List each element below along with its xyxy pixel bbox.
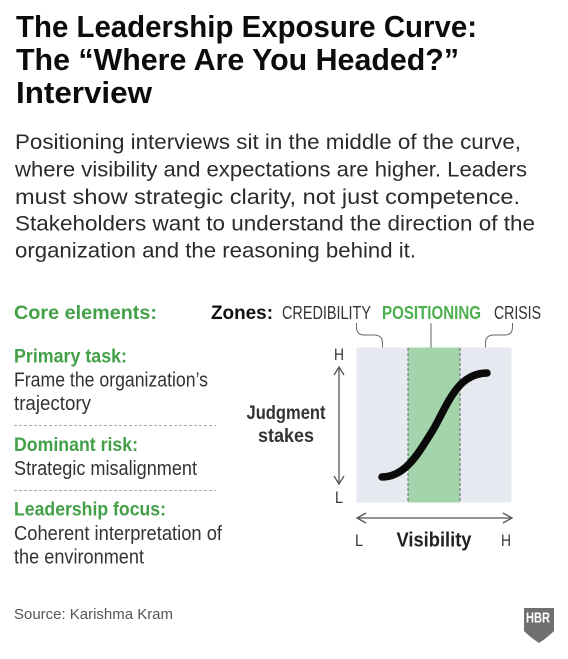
title: Interview [16,76,152,110]
intro text block: where visibility and expectations are higher. Leaders [14,158,527,182]
source: Source: Karishma Kram [14,607,173,623]
core element: leadership focus: Leadership focus: [14,498,166,520]
core element: leadership focus: the environment [14,546,144,568]
y axis labels: stakes [258,426,314,447]
y axis arrow [334,367,344,484]
core element: primary task: trajectory [14,393,91,415]
chart background [356,348,512,502]
x axis labels: H [501,531,511,550]
x axis labels: Visibility [396,528,472,552]
core element: dominant risk [14,434,197,480]
core element: leadership focus: Coherent interpretation of [14,523,222,545]
title [16,10,477,110]
intro text block: Stakeholders want to understand the direction of the [15,212,535,236]
zones legend: CRISIS [494,302,541,323]
title: The “Where Are You Headed?” [16,43,459,77]
intro text block: Positioning interviews sit in the middle of the curve, [15,130,521,154]
zones legend: CREDIBILITY [282,302,371,323]
x axis arrow [357,513,512,523]
zone leader lines [356,323,512,348]
core element: primary task: Frame the organization’s [14,370,208,392]
x axis labels: L [355,531,363,550]
heading: core elements: Core elements: [14,302,157,324]
y axis labels: H [334,345,344,364]
icon: hbr shield logo [524,608,554,643]
core element: primary task: Primary task: [14,346,127,368]
core element: dominant risk: Strategic misalignment [14,458,197,480]
intro text block [14,130,535,262]
positioning zone [408,348,460,502]
core element: leadership focus [14,498,222,568]
intro text block: organization and the reasoning behind it. [15,238,416,262]
s-curve [382,373,487,477]
y axis labels: L [335,488,343,507]
zones legend [211,302,541,324]
core element: primary task [14,346,208,415]
title: The Leadership Exposure Curve: [16,10,477,44]
core element: dominant risk: Dominant risk: [14,434,138,456]
y axis labels: Judgment [246,403,326,424]
zones legend: POSITIONING [382,302,481,323]
x axis labels [355,528,511,552]
intro text block: must show strategic clarity, not just competence. [15,185,520,209]
icon: hbr shield logo: HBR [526,610,550,626]
chart: exposure curve [356,348,512,502]
y axis labels [246,345,344,507]
zones legend: Zones: [211,302,273,324]
